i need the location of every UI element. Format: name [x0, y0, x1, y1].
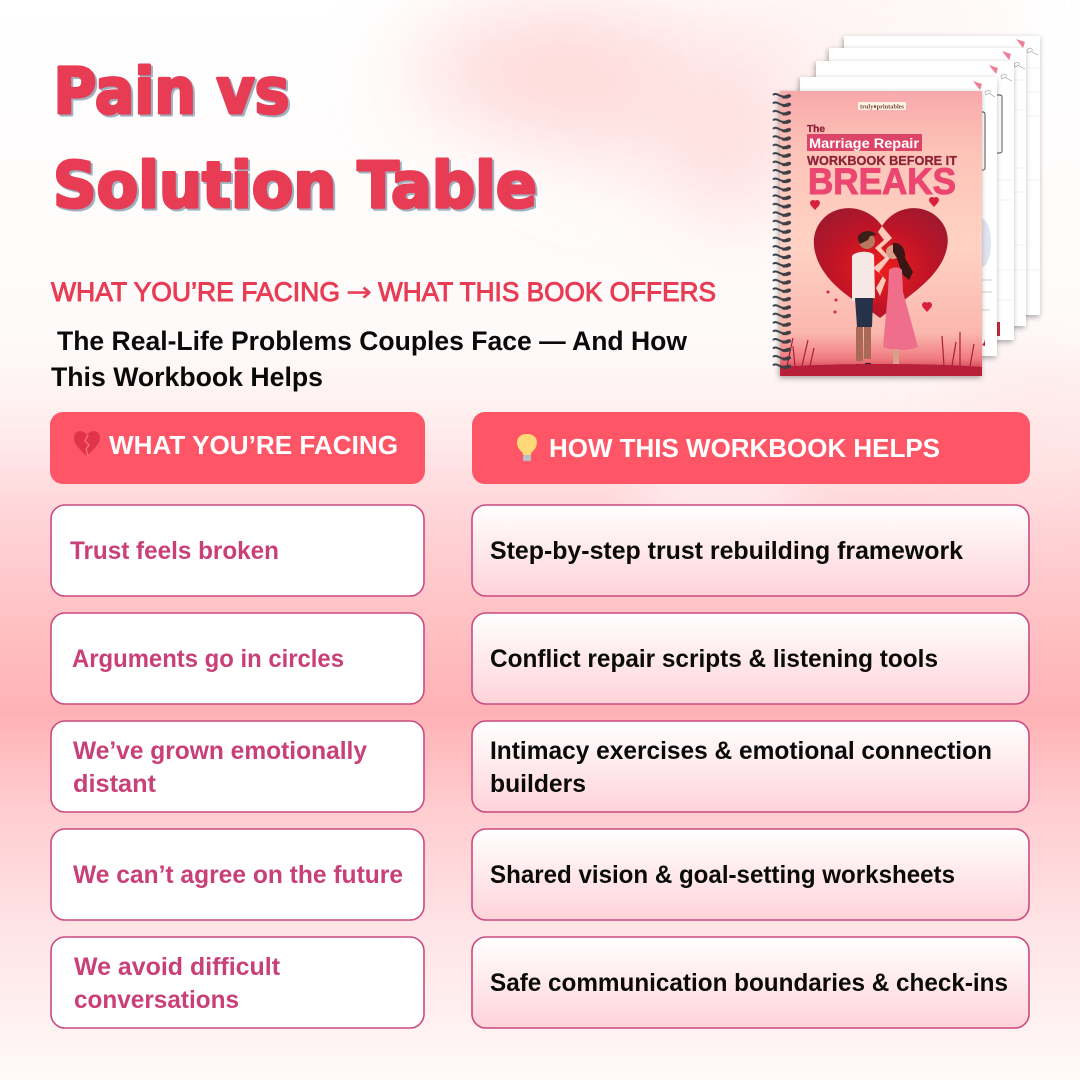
- pain 3: We’ve grown emotionally: [73, 737, 367, 765]
- subheading: →: [346, 277, 372, 308]
- pain 1: [51, 505, 424, 596]
- icon: light bulb: [517, 434, 537, 461]
- header: what you're facing: [50, 412, 425, 484]
- pain 5: conversations: [74, 986, 239, 1014]
- solution 1: [472, 505, 1029, 596]
- intro text: This Workbook Helps: [51, 362, 323, 392]
- couple: [852, 231, 918, 372]
- solution 3: builders: [490, 770, 586, 798]
- cover title: [807, 123, 957, 202]
- small hearts: [810, 197, 939, 314]
- solution 1: Step-by-step trust rebuilding framework: [490, 537, 963, 565]
- header: how this workbook helps: [472, 412, 1030, 484]
- solution 2: Conflict repair scripts & listening tools: [490, 645, 938, 673]
- pain 4: [51, 829, 424, 920]
- intro text: The Real-Life Problems Couples Face — And How: [57, 326, 688, 356]
- pain 3: [51, 721, 424, 812]
- pain 1: Trust feels broken: [70, 537, 279, 565]
- pain 3: distant: [73, 770, 157, 798]
- solution 5: [472, 937, 1029, 1028]
- pain 2: [51, 613, 424, 704]
- brand label: truly♦printables: [860, 104, 904, 110]
- subheading: WHAT YOU’RE FACING: [51, 277, 340, 307]
- book cover: [780, 91, 982, 376]
- header: how this workbook helps: HOW THIS WORKBOOK HELPS: [549, 433, 940, 463]
- ground and grass: [780, 332, 982, 376]
- title: Solution Table: [55, 151, 539, 224]
- title: Solution Table: [53, 149, 537, 222]
- solution 5: Safe communication boundaries & check-ins: [490, 969, 1008, 997]
- title: Pain vs: [54, 55, 290, 128]
- cover title: WORKBOOK BEFORE IT: [807, 153, 957, 168]
- solution 3: Intimacy exercises & emotional connection: [490, 737, 992, 765]
- cover title: The: [807, 123, 825, 135]
- cover title: Marriage Repair: [809, 136, 920, 151]
- solution 3: [472, 721, 1029, 812]
- pain 5: We avoid difficult: [74, 953, 281, 981]
- left column: pains: [51, 505, 424, 1028]
- pain 5: [51, 937, 424, 1028]
- title: Pain vs: [56, 57, 292, 130]
- subheading: [51, 277, 716, 308]
- subheading: WHAT THIS BOOK OFFERS: [378, 277, 716, 307]
- cover title: BREAKS: [808, 161, 956, 202]
- title: [53, 55, 539, 224]
- pain 4: We can’t agree on the future: [73, 861, 403, 889]
- spiral binding: [772, 92, 792, 370]
- stacked worksheet pages: [800, 36, 1040, 356]
- workbook mockup: [772, 36, 1040, 376]
- pain 2: Arguments go in circles: [72, 645, 344, 673]
- intro text: [51, 326, 688, 392]
- solution 2: [472, 613, 1029, 704]
- header: what you're facing: WHAT YOU’RE FACING: [109, 430, 398, 460]
- icon: broken heart: [74, 431, 100, 456]
- broken heart: [814, 208, 948, 318]
- right column: solutions: [472, 505, 1029, 1028]
- solution 4: Shared vision & goal-setting worksheets: [490, 861, 955, 889]
- solution 4: [472, 829, 1029, 920]
